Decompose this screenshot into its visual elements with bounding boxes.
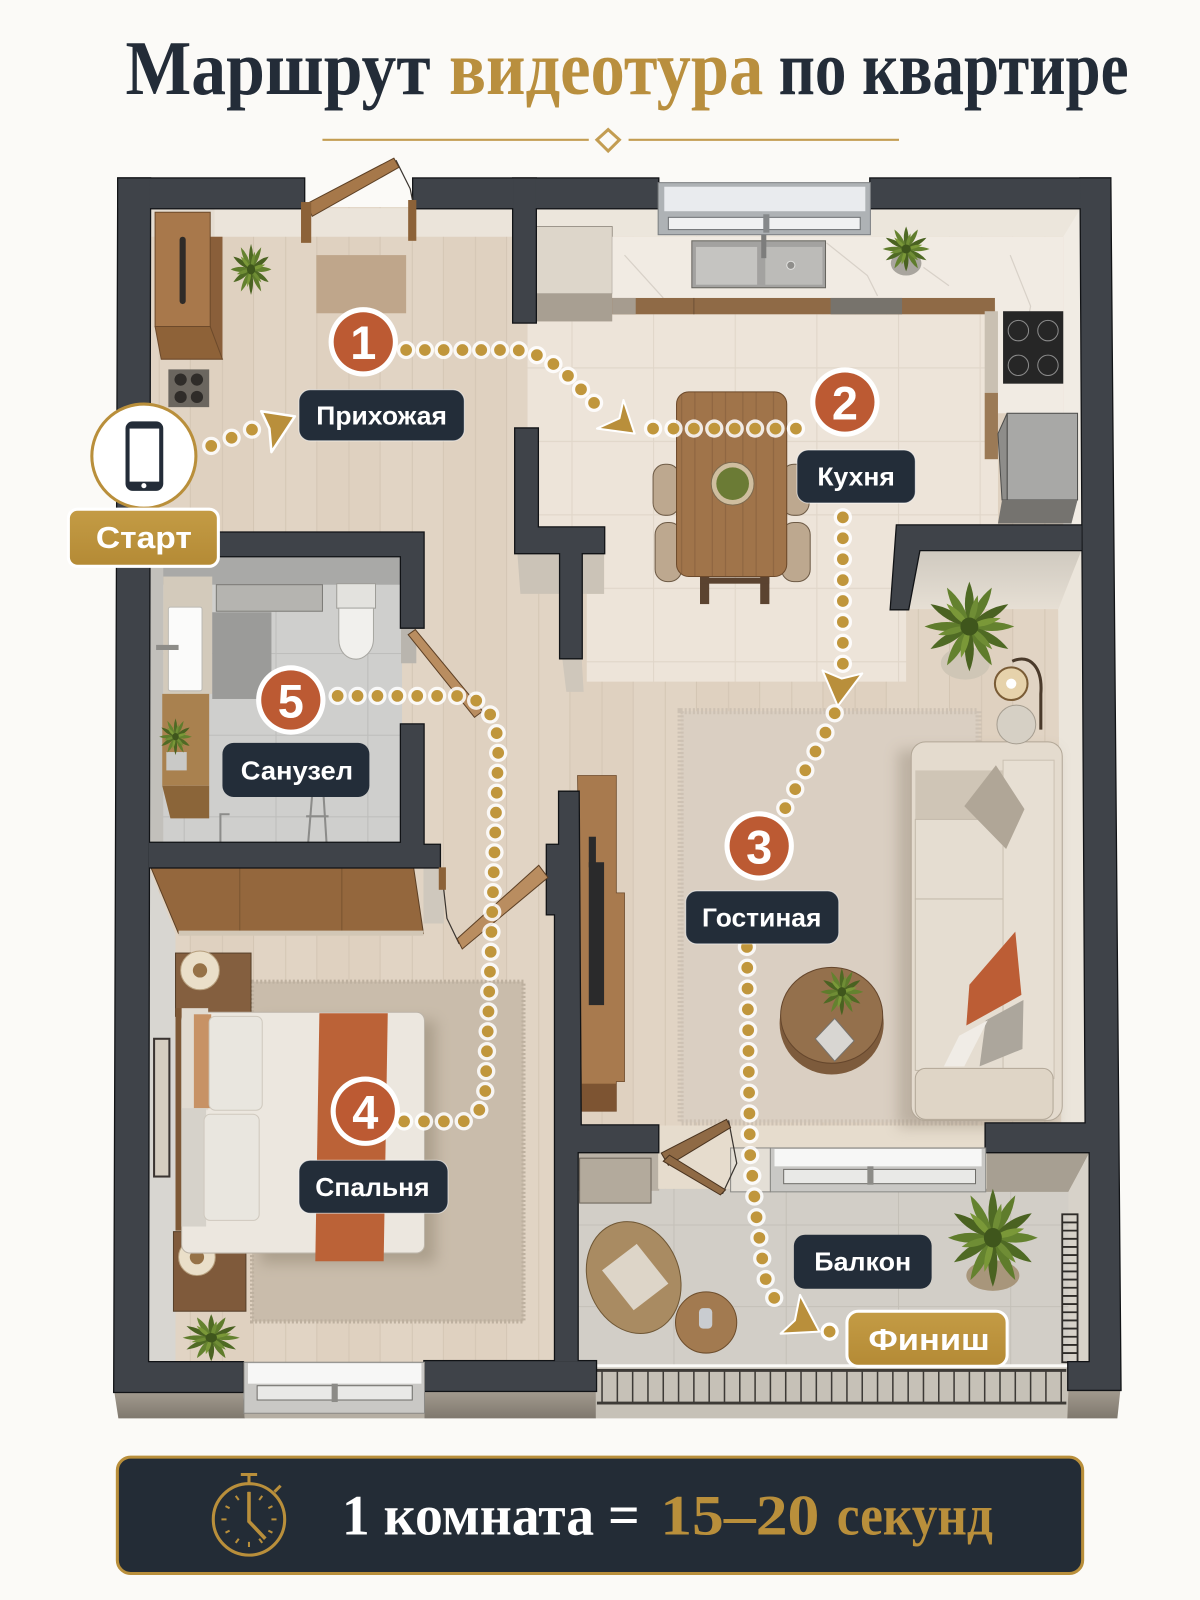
title: видеотура [449, 25, 763, 111]
label: kitchen [797, 367, 915, 503]
start label [68, 509, 218, 566]
label: balcony [794, 1235, 932, 1289]
step badge 5: 5 [278, 675, 304, 727]
entry door [301, 158, 416, 243]
icon: kitchen plant [883, 227, 930, 276]
sofa [911, 742, 1062, 1120]
balcony railing [597, 1214, 1078, 1403]
bedside 2 [173, 1232, 246, 1311]
doors [301, 158, 737, 1195]
sofa cushions [944, 765, 1024, 1066]
title: по квартире [779, 25, 1129, 111]
room name: bedroom [299, 1160, 448, 1213]
shoes tray [168, 369, 209, 407]
title [126, 25, 1129, 111]
tv unit [578, 776, 624, 1111]
time text: duration: 15–20 [660, 1485, 819, 1548]
icon: vanity plant [159, 718, 192, 770]
bed runner [315, 1013, 388, 1261]
marble countertop [612, 237, 1063, 413]
dining chairs [653, 464, 810, 582]
balcony furniture [571, 1158, 1078, 1403]
icon: hallway plant [231, 244, 271, 295]
kitchen furniture [536, 227, 1078, 604]
entry mat [316, 255, 406, 313]
windows [244, 183, 986, 1413]
dining table [677, 392, 787, 577]
icon: floor plant [924, 582, 1014, 680]
room name: kitchen: Кухня [817, 464, 895, 492]
time text: seconds: секунд [837, 1485, 993, 1548]
balcony window [731, 1148, 986, 1192]
console table [155, 212, 222, 359]
vanity [162, 694, 209, 818]
bed [176, 1008, 424, 1253]
cabinet fronts [612, 298, 995, 314]
route: living room to balcony [747, 947, 830, 1334]
left kitchen block [536, 227, 612, 321]
bed shadow [260, 1020, 436, 1263]
finish label [847, 1311, 1007, 1366]
title: Маршрут [126, 25, 431, 111]
sink counter [156, 577, 212, 694]
side cabinets [985, 311, 998, 459]
end chair [700, 569, 769, 604]
fridge [998, 413, 1078, 523]
hallway furniture [155, 212, 406, 407]
step badge 2: 2 [832, 377, 858, 429]
step badge 4 [331, 1077, 400, 1146]
living room furniture [578, 582, 1062, 1128]
sofa shadow [898, 750, 1056, 1128]
step badge 3: 3 [746, 821, 772, 873]
label: bathroom [222, 665, 369, 797]
finish label: Финиш [868, 1323, 990, 1357]
start label: Старт [96, 521, 192, 555]
bottom time bar [117, 1457, 1083, 1573]
icon: smartphone [92, 404, 196, 508]
floor: wood planks [149, 207, 1084, 1362]
rug [681, 711, 979, 1122]
bath box [216, 585, 322, 611]
centre bowl [711, 462, 754, 505]
toilet [337, 584, 376, 659]
floor lamp [995, 659, 1041, 744]
room name: bedroom: Спальня [315, 1174, 430, 1202]
bath mat [212, 612, 271, 699]
icon: bedroom plant [183, 1314, 240, 1361]
balcony storage [580, 1158, 651, 1203]
wicker chair [571, 1208, 696, 1347]
cooktop [1003, 311, 1063, 384]
walls [114, 179, 1120, 1392]
room name: hallway: Прихожая [316, 402, 447, 430]
bedside 1 [176, 951, 251, 1016]
side table [676, 1292, 737, 1353]
route: kitchen to living room [783, 517, 862, 813]
step badge 1 [329, 307, 398, 377]
title divider [322, 130, 899, 151]
icon: balcony plant [948, 1189, 1038, 1291]
room name: living room [686, 891, 839, 944]
bedroom furniture [150, 865, 523, 1361]
room name: hallway [299, 390, 464, 441]
floor: kitchen tile [528, 314, 998, 682]
balcony door [661, 1119, 737, 1195]
apartment floor plan [114, 158, 1120, 1418]
icon: stopwatch [213, 1474, 285, 1555]
room name: bathroom: Санузел [241, 758, 353, 786]
step badge 3 [724, 811, 794, 881]
label: hallway [299, 307, 464, 441]
bedroom window [244, 1362, 424, 1413]
rug [252, 982, 523, 1321]
floor: balcony [578, 1189, 1069, 1364]
room name: bathroom [222, 743, 369, 797]
bathroom furniture [156, 577, 376, 843]
label: balcony: Балкон [814, 1248, 911, 1276]
time text: one room: 1 комната = [342, 1485, 640, 1548]
front faces of outer walls [114, 1367, 1120, 1418]
route: hallway to kitchen [406, 350, 816, 434]
floor: bathroom [150, 556, 402, 844]
step badge 1: 1 [350, 317, 376, 369]
label: bedroom [299, 1077, 448, 1213]
bathroom door [408, 630, 483, 717]
icon: table plant [820, 968, 863, 1015]
wardrobe [150, 865, 423, 936]
route: start to hallway [211, 411, 295, 452]
inner wall faces [148, 208, 1090, 1362]
video tour route [211, 350, 862, 1334]
room name: living room: Гостиная [702, 905, 821, 933]
picture [154, 1039, 169, 1177]
label: living room [686, 811, 839, 944]
start marker [68, 404, 218, 566]
step badge 5 [256, 665, 326, 735]
route: bedroom to bathroom [335, 696, 498, 1121]
coffee table [780, 967, 884, 1074]
sink [692, 230, 826, 288]
bedroom door [439, 865, 548, 949]
shower frame [220, 794, 329, 843]
kitchen window [658, 183, 870, 235]
step badge 4: 4 [352, 1087, 378, 1139]
